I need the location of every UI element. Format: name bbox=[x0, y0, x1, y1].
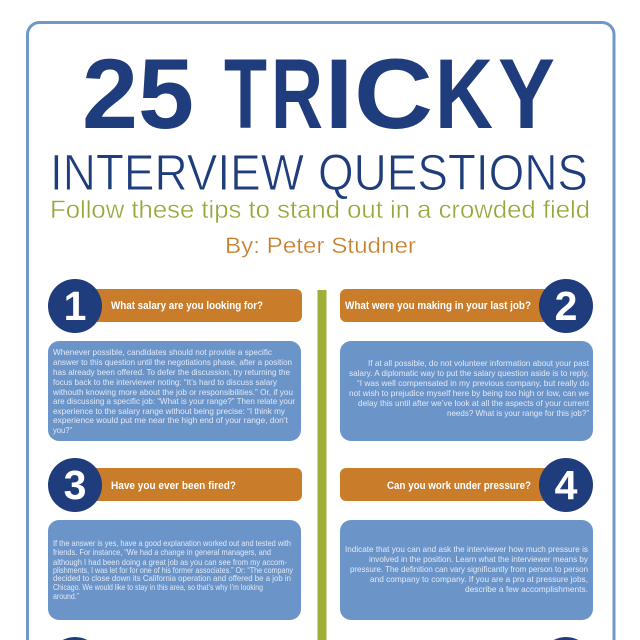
subtitle: Interview Questions: INTERVIEW bbox=[50, 144, 304, 201]
question 4 header: 4 bbox=[555, 462, 578, 508]
answer panel 4: and company to company. If you are a pro at pressure jobs, bbox=[370, 574, 588, 584]
answer panel 3: plishments, I was let for for one of his former associates.” Or: “The company bbox=[53, 565, 294, 575]
subtitle: Interview Questions bbox=[50, 144, 588, 201]
question text 4: Can you work under pressure? bbox=[387, 480, 531, 492]
title: 25 Tricky bbox=[82, 38, 555, 149]
answer panel 2: “I was well compensated in my previous company, but really do bbox=[357, 378, 589, 388]
answer panel 1: experience to the salary range without being precise: “I think my bbox=[53, 406, 286, 416]
question bar 4 bbox=[340, 468, 566, 501]
question 4 header bbox=[340, 458, 593, 512]
answer panel 3: although I had been doing a great job as you can see from my accom- bbox=[53, 557, 287, 567]
tagline: Follow these tips to stand out in a crowded field bbox=[50, 196, 590, 224]
number badge 2 bbox=[539, 279, 593, 333]
byline: By: Peter Studner bbox=[225, 233, 416, 258]
question bar 1 bbox=[75, 289, 302, 322]
question bar 2 bbox=[340, 289, 566, 322]
answer panel 2: delay this until after we’ve look at all the aspects of your current bbox=[358, 398, 590, 408]
answer panel 1: you?” bbox=[53, 425, 72, 435]
answer panel 1: are discussing a specific job: “What is your range?” Then relate your bbox=[53, 396, 295, 406]
question 3 header: 3 bbox=[64, 462, 86, 508]
answer panel 3: Chicago. We would like to stay in this area, so that’s why I’m looking bbox=[53, 582, 263, 592]
answer panel 4: involved in the position. Learn what the interviewer means by bbox=[369, 554, 589, 564]
answer panel 3: around.” bbox=[53, 591, 79, 601]
answer panel 1: answer to this question until the negotiations phase, after a position bbox=[53, 357, 292, 367]
answer panel 2 bbox=[340, 341, 593, 441]
answer panel 3 bbox=[48, 520, 301, 620]
answer panel 1: experience would put me near the high end of your range, don’t bbox=[53, 415, 289, 425]
title: 25 Tricky: K bbox=[435, 38, 493, 149]
answer panel 3: friends. For instance, “We had a change in general managers, and bbox=[53, 547, 271, 557]
center divider bbox=[318, 290, 326, 640]
question 1 header: 1 bbox=[64, 283, 86, 329]
question 2 header bbox=[340, 279, 593, 333]
answer panel 2: If at all possible, do not volunteer information about your past bbox=[368, 358, 590, 368]
answer panel 4 bbox=[340, 520, 593, 620]
number badge 5, cropped bbox=[63, 637, 87, 640]
answer panel 1 bbox=[48, 341, 301, 441]
title: 25 Tricky: I bbox=[325, 38, 353, 149]
question 2 header: 2 bbox=[555, 283, 577, 329]
title: 25 Tricky: T bbox=[224, 38, 267, 149]
answer panel 4: describe a few accomplishments. bbox=[465, 584, 588, 594]
answer panel 1: focus back to the interviewer noting: “It’s hard to discuss salary bbox=[53, 377, 278, 387]
number badge 3 bbox=[48, 458, 102, 512]
answer panel 2: not wish to prejudice myself here by being too high or low, can we bbox=[349, 388, 589, 398]
question 3 header bbox=[48, 458, 302, 512]
question text 3: Have you ever been fired? bbox=[111, 480, 236, 492]
number badge 1 bbox=[48, 279, 102, 333]
answer panel 4: pressure. The definition can vary significantly from person to person bbox=[350, 564, 588, 574]
answer panel 4: Indicate that you can and ask the interviewer how much pressure is bbox=[345, 544, 588, 554]
answer panel 1: withouth knowing more about the job or responsibilities.” Or, if you bbox=[52, 387, 293, 397]
answer panel 1: has already been offered. To defer the discussion, try returning the bbox=[53, 367, 290, 377]
title: 25 Tricky: C bbox=[354, 38, 433, 149]
title: 25 Tricky: R bbox=[271, 38, 323, 149]
question bar 3 bbox=[75, 468, 302, 501]
question 1 header bbox=[48, 279, 302, 333]
answer panel 2: needs? What is your range for this job?” bbox=[447, 408, 589, 418]
subtitle: Interview Questions: QUESTIONS bbox=[318, 144, 588, 201]
answer panel 2: salary. A diplomatic way to put the salary question aside is to reply, bbox=[349, 368, 589, 378]
question text 1: What salary are you looking for? bbox=[111, 300, 263, 312]
answer panel 1: Whenever possible, candidates should not provide a specific bbox=[53, 347, 272, 357]
question text 2: What were you making in your last job? bbox=[345, 300, 531, 312]
answer panel 3: decided to close down its California operation and offered be a job in bbox=[53, 573, 291, 583]
answer panel 3: If the answer is yes, have a good explanation worked out and tested with bbox=[53, 538, 291, 548]
number badge 4 bbox=[539, 458, 593, 512]
number badge 6, cropped bbox=[554, 637, 578, 640]
title: 25 Tricky: 25 bbox=[82, 38, 194, 149]
title: 25 Tricky: Y bbox=[498, 38, 555, 149]
